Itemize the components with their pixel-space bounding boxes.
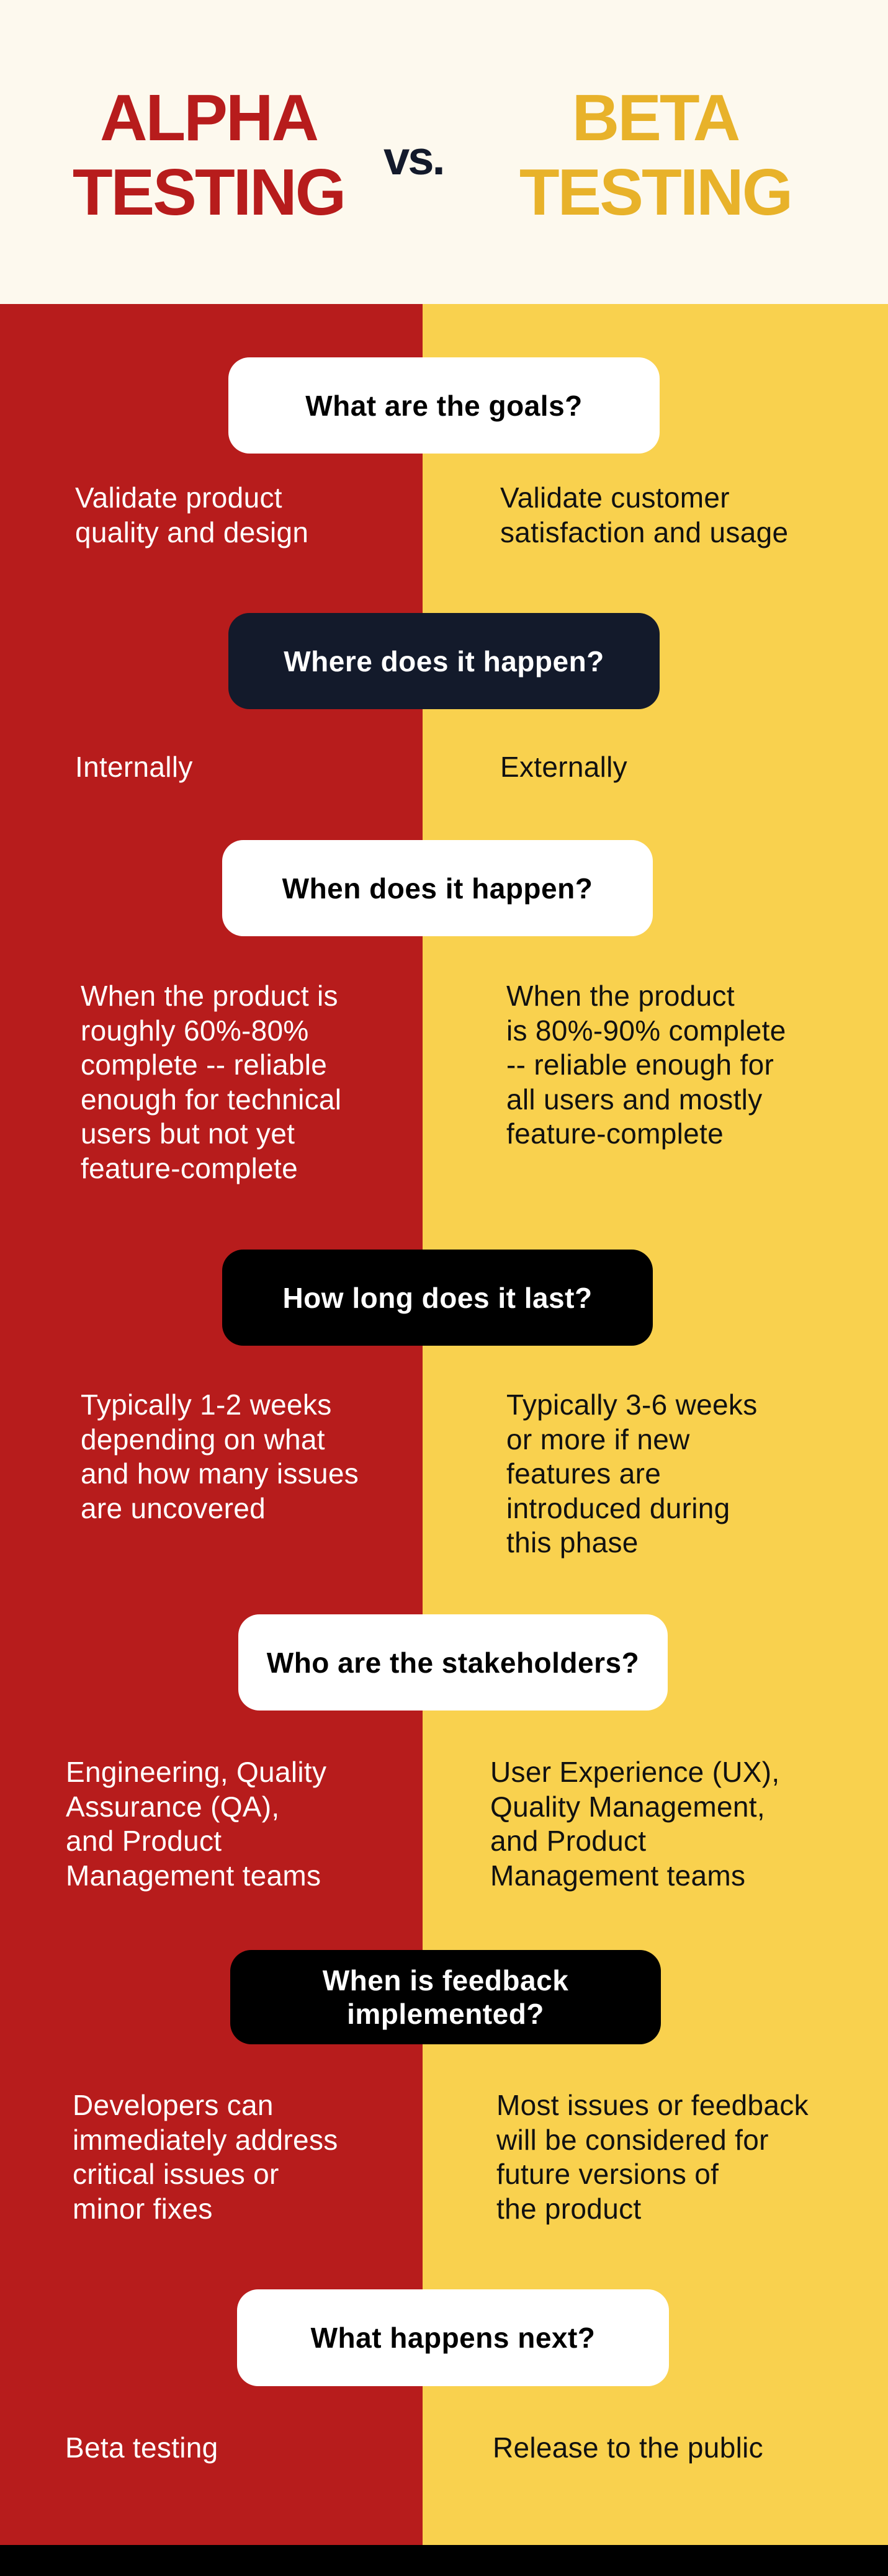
text: alpha when: complete -- reliable bbox=[81, 1049, 327, 1081]
text: alpha goals bbox=[75, 481, 308, 548]
text: alpha when: enough for technical bbox=[81, 1083, 341, 1116]
pill: when bbox=[222, 840, 653, 936]
text: beta when: -- reliable enough for bbox=[506, 1049, 774, 1081]
text: alpha stakeholders bbox=[66, 1756, 326, 1892]
text: beta stakeholders: Quality Management, bbox=[490, 1791, 765, 1823]
text: alpha stakeholders: Assurance (QA), bbox=[66, 1791, 279, 1823]
text: beta when bbox=[506, 980, 786, 1150]
footer bar bbox=[0, 2545, 888, 2576]
pill: goals bbox=[228, 357, 660, 454]
text: beta where: Externally bbox=[500, 751, 627, 783]
text: beta when: is 80%-90% complete bbox=[506, 1014, 786, 1047]
header bbox=[0, 0, 888, 304]
text: alpha goals: quality and design bbox=[75, 516, 308, 548]
text: alpha when bbox=[81, 980, 341, 1184]
title: alpha testing: TESTING bbox=[73, 156, 344, 229]
text: beta duration: Typically 3-6 weeks bbox=[506, 1389, 758, 1421]
text: alpha feedback: critical issues or bbox=[73, 2158, 279, 2190]
text: alpha duration: Typically 1-2 weeks bbox=[81, 1389, 332, 1421]
text: alpha stakeholders: Management teams bbox=[66, 1859, 321, 1892]
pill: when: When does it happen? bbox=[282, 872, 593, 905]
text: beta stakeholders: Management teams bbox=[490, 1859, 745, 1892]
pill: feedback: implemented? bbox=[347, 1998, 544, 2030]
text: beta stakeholders bbox=[490, 1756, 779, 1892]
pill: where: Where does it happen? bbox=[284, 645, 604, 678]
text: beta next: Release to the public bbox=[493, 2431, 763, 2464]
title: beta testing: BETA bbox=[572, 81, 738, 154]
text: beta when: all users and mostly bbox=[506, 1083, 762, 1116]
text: alpha where: Internally bbox=[75, 751, 193, 783]
pill: stakeholders bbox=[238, 1614, 668, 1711]
text: alpha duration bbox=[81, 1389, 359, 1524]
pill: where bbox=[228, 613, 660, 709]
text: alpha when: users but not yet bbox=[81, 1117, 295, 1150]
text: alpha goals: Validate product bbox=[75, 481, 282, 514]
pill: feedback bbox=[230, 1950, 661, 2044]
title: beta testing bbox=[519, 81, 791, 229]
text: beta feedback: Most issues or feedback bbox=[496, 2089, 809, 2121]
title: alpha testing bbox=[73, 81, 344, 229]
text: beta duration bbox=[506, 1389, 758, 1559]
text: alpha feedback: immediately address bbox=[73, 2124, 338, 2156]
vs: vs. bbox=[383, 132, 444, 185]
text: beta feedback: the product bbox=[496, 2193, 641, 2225]
text: alpha duration: depending on what bbox=[81, 1423, 325, 1456]
text: alpha stakeholders: and Product bbox=[66, 1825, 222, 1857]
text: alpha feedback bbox=[73, 2089, 338, 2225]
text: beta when: When the product bbox=[506, 980, 735, 1012]
panel: beta column bbox=[423, 304, 888, 2545]
text: alpha stakeholders: Engineering, Quality bbox=[66, 1756, 326, 1788]
text: beta feedback bbox=[496, 2089, 809, 2225]
text: beta duration: or more if new bbox=[506, 1423, 690, 1456]
text: beta when: feature-complete bbox=[506, 1117, 724, 1150]
text: beta goals: satisfaction and usage bbox=[500, 516, 788, 548]
pill: next: What happens next? bbox=[311, 2322, 595, 2354]
text: alpha feedback: Developers can bbox=[73, 2089, 274, 2121]
text: beta goals: Validate customer bbox=[500, 481, 730, 514]
text: beta duration: introduced during bbox=[506, 1492, 730, 1524]
panel: alpha column bbox=[0, 304, 423, 2545]
text: beta feedback: future versions of bbox=[496, 2158, 719, 2190]
pill: how long: How long does it last? bbox=[282, 1282, 593, 1314]
pill: feedback: When is feedback bbox=[323, 1964, 568, 1997]
title: alpha testing: ALPHA bbox=[100, 81, 317, 154]
text: beta goals bbox=[500, 481, 788, 548]
text: beta stakeholders: User Experience (UX), bbox=[490, 1756, 779, 1788]
pill: stakeholders: Who are the stakeholders? bbox=[267, 1647, 639, 1679]
text: alpha when: feature-complete bbox=[81, 1152, 298, 1184]
text: beta stakeholders: and Product bbox=[490, 1825, 646, 1857]
text: beta duration: this phase bbox=[506, 1526, 639, 1559]
pill: next bbox=[237, 2289, 669, 2386]
text: alpha duration: are uncovered bbox=[81, 1492, 266, 1524]
pill: goals: What are the goals? bbox=[305, 390, 583, 422]
text: alpha when: roughly 60%-80% bbox=[81, 1014, 309, 1047]
text: alpha next: Beta testing bbox=[65, 2431, 218, 2464]
text: alpha duration: and how many issues bbox=[81, 1457, 359, 1490]
text: alpha when: When the product is bbox=[81, 980, 338, 1012]
text: beta duration: features are bbox=[506, 1457, 661, 1490]
title: beta testing: TESTING bbox=[519, 156, 791, 229]
text: beta feedback: will be considered for bbox=[496, 2124, 769, 2156]
text: alpha feedback: minor fixes bbox=[73, 2193, 213, 2225]
pill: how long bbox=[222, 1250, 653, 1346]
